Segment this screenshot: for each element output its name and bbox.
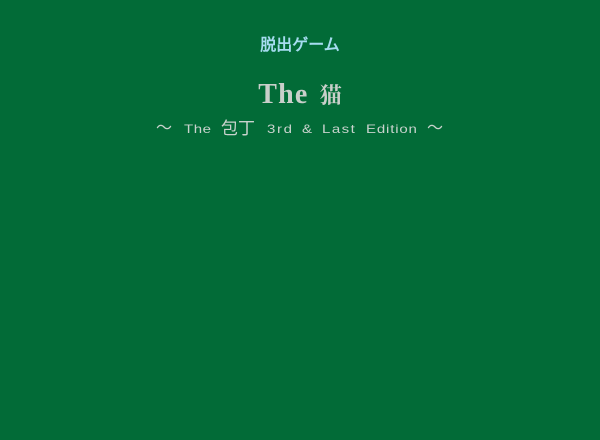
subtitle: ～	[156, 120, 172, 137]
subtitle: 包丁	[221, 119, 255, 138]
subtitle	[156, 119, 443, 138]
subtitle: &	[302, 122, 312, 136]
title: The 猫	[258, 79, 342, 110]
subtitle: Last	[322, 122, 356, 136]
subtitle: 3rd	[267, 122, 294, 136]
subtitle: Edition	[366, 122, 418, 136]
subtitle: The	[184, 122, 212, 136]
subtitle: ～	[427, 120, 443, 137]
heading: genre label: 脱出ゲーム	[260, 37, 340, 54]
